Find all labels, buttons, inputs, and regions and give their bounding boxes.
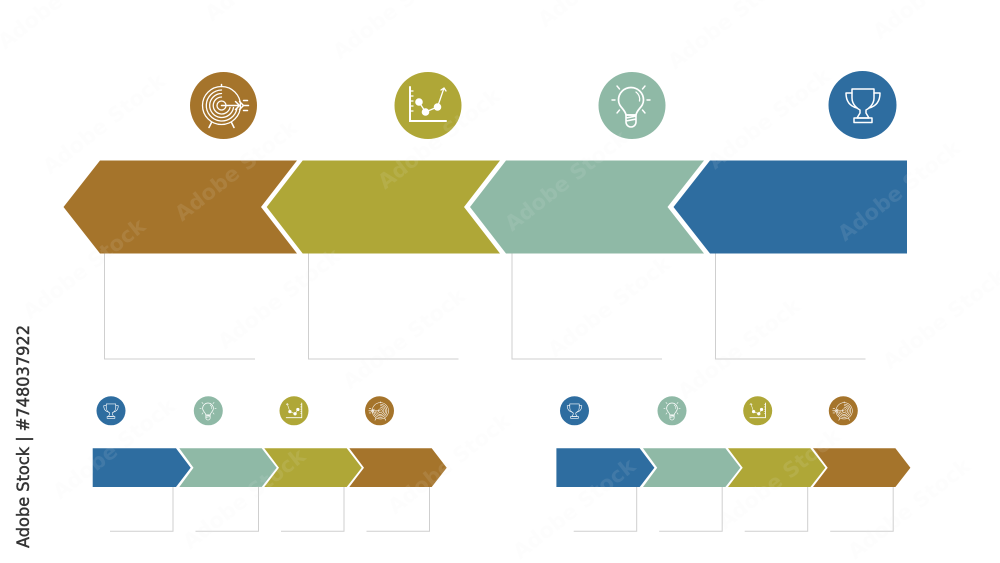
large icon: line chart on olive circle [394, 72, 462, 139]
small arrow: olive [264, 448, 362, 487]
watermarks: Adobe Stock [38, 68, 171, 179]
large icon: trophy on blue circle [828, 71, 896, 139]
watermarks: Adobe Stock [338, 283, 471, 394]
small diagram: left [93, 396, 447, 531]
small icon: chart [280, 396, 308, 425]
main arrow bar [64, 160, 907, 254]
small brackets [574, 487, 893, 531]
watermarks: Adobe Stock [170, 115, 303, 226]
watermarks: Adobe Stock [543, 251, 676, 362]
large icon: target on brown circle [190, 72, 257, 139]
small arrow: olive [728, 448, 825, 487]
small arrow: brown [813, 448, 910, 487]
small arrow: teal [643, 448, 740, 487]
watermarks: Adobe Stock [703, 63, 836, 174]
watermarks: Adobe Stock [18, 213, 151, 324]
small icon: bulb [194, 396, 223, 425]
empty text bracket 4 [716, 254, 866, 359]
watermarks: Adobe Stock [508, 453, 641, 563]
arrow segment: teal [470, 160, 704, 254]
empty text bracket 1 [104, 254, 255, 359]
watermarks: Adobe Stock [383, 408, 516, 519]
small icon: chart [743, 396, 772, 425]
stock id label: Adobe Stock | #748037922 [14, 325, 34, 548]
small icon: trophy [96, 396, 126, 425]
small arrow: brown [349, 448, 447, 487]
small icon: trophy [560, 396, 589, 425]
empty text bracket 3 [512, 254, 662, 359]
small icon: target [365, 396, 394, 425]
small diagram: right [556, 396, 910, 531]
arrow segment: blue [674, 160, 907, 254]
watermarks: Adobe Stock [500, 125, 633, 236]
watermarks: Adobe Stock [713, 423, 846, 534]
small arrow: blue [93, 448, 191, 487]
empty text bracket 2 [308, 254, 458, 359]
watermarks: Adobe Stock [213, 243, 346, 354]
watermarks: Adobe Stock [48, 393, 181, 504]
watermarks: Adobe Stock [178, 443, 311, 554]
large icon: light bulb on teal circle [598, 72, 666, 139]
watermarks: Adobe Stock [833, 135, 966, 246]
small icon: bulb [658, 396, 686, 425]
small brackets [110, 487, 430, 531]
arrow segment: olive [267, 160, 500, 254]
small arrow: teal [179, 448, 277, 487]
small arrow: blue [556, 448, 654, 487]
watermarks: Adobe Stock [673, 293, 806, 404]
small icon: target [829, 396, 858, 425]
watermarks: Adobe Stock [373, 83, 506, 194]
arrow segment: brown [64, 160, 297, 254]
watermarks: Adobe Stock [843, 453, 976, 563]
